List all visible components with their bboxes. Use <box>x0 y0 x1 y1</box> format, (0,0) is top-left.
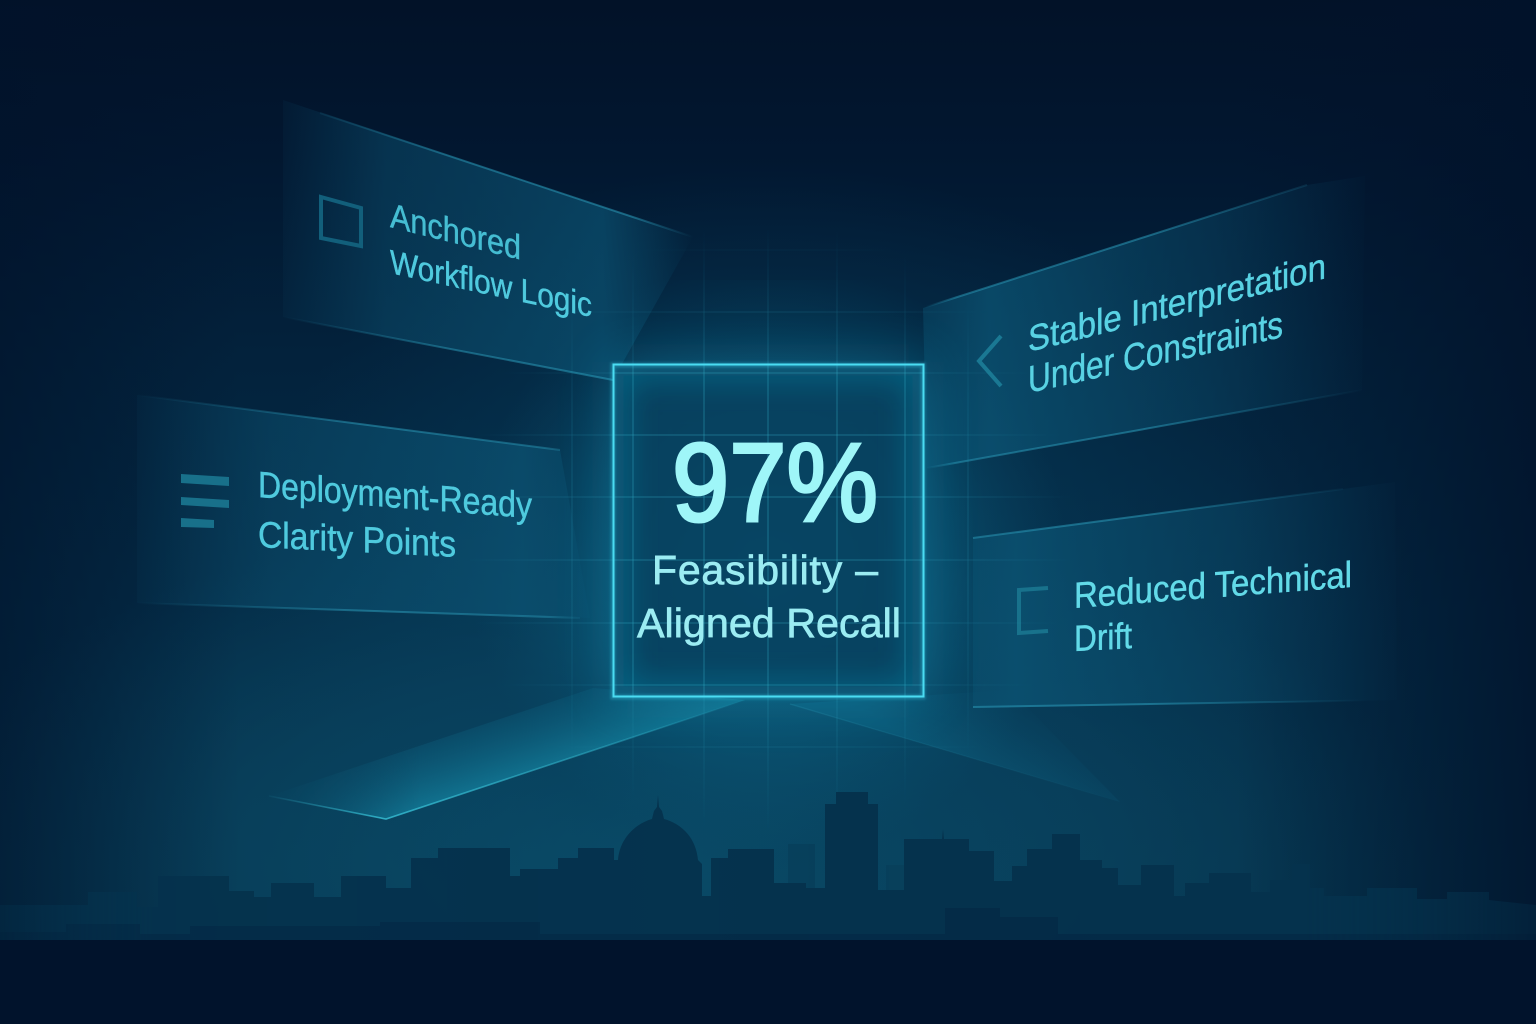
center callout box <box>613 364 924 697</box>
label: stable interpretation under constraints: Under Constraints <box>1028 302 1283 401</box>
panel: deployment-ready clarity points <box>137 395 590 618</box>
label: anchored workflow logic: Workflow Logic <box>390 243 592 324</box>
panel: reduced technical drift <box>973 482 1397 708</box>
label: feasibility-aligned recall <box>637 547 901 646</box>
label: deployment-ready clarity points <box>258 465 533 565</box>
label: anchored workflow logic <box>390 197 592 324</box>
city skyline silhouette <box>154 792 1536 940</box>
icon: chevron <box>979 336 1001 386</box>
panel: stable interpretation under constraints <box>923 176 1365 468</box>
label: feasibility-aligned recall: Aligned Recall <box>637 600 901 646</box>
label: deployment-ready clarity points: Clarity Points <box>258 514 456 565</box>
icon: square outline <box>321 197 361 246</box>
main skyline <box>196 792 1536 934</box>
label: reduced technical drift: Reduced Technical <box>1074 555 1352 616</box>
label: reduced technical drift: Drift <box>1074 616 1132 660</box>
label: reduced technical drift <box>1074 555 1352 660</box>
back faint buildings <box>808 844 815 856</box>
label: anchored workflow logic: Anchored <box>390 197 521 268</box>
label: deployment-ready clarity points: Deployment-Ready <box>258 465 533 527</box>
ground strip <box>0 940 1536 1024</box>
beam: lower left <box>269 688 745 819</box>
icon: three bars <box>181 474 229 528</box>
panel: anchored workflow logic <box>283 100 693 380</box>
icon: bracket <box>1019 588 1048 633</box>
glow around center box <box>610 362 926 700</box>
front low band <box>0 908 1536 950</box>
stat: 97%: 97% <box>672 421 878 545</box>
label: feasibility-aligned recall: Feasibility – <box>652 547 878 593</box>
label: stable interpretation under constraints: Stable Interpretation <box>1028 246 1326 360</box>
background grid <box>508 250 1039 793</box>
beam: lower right <box>790 690 1120 802</box>
